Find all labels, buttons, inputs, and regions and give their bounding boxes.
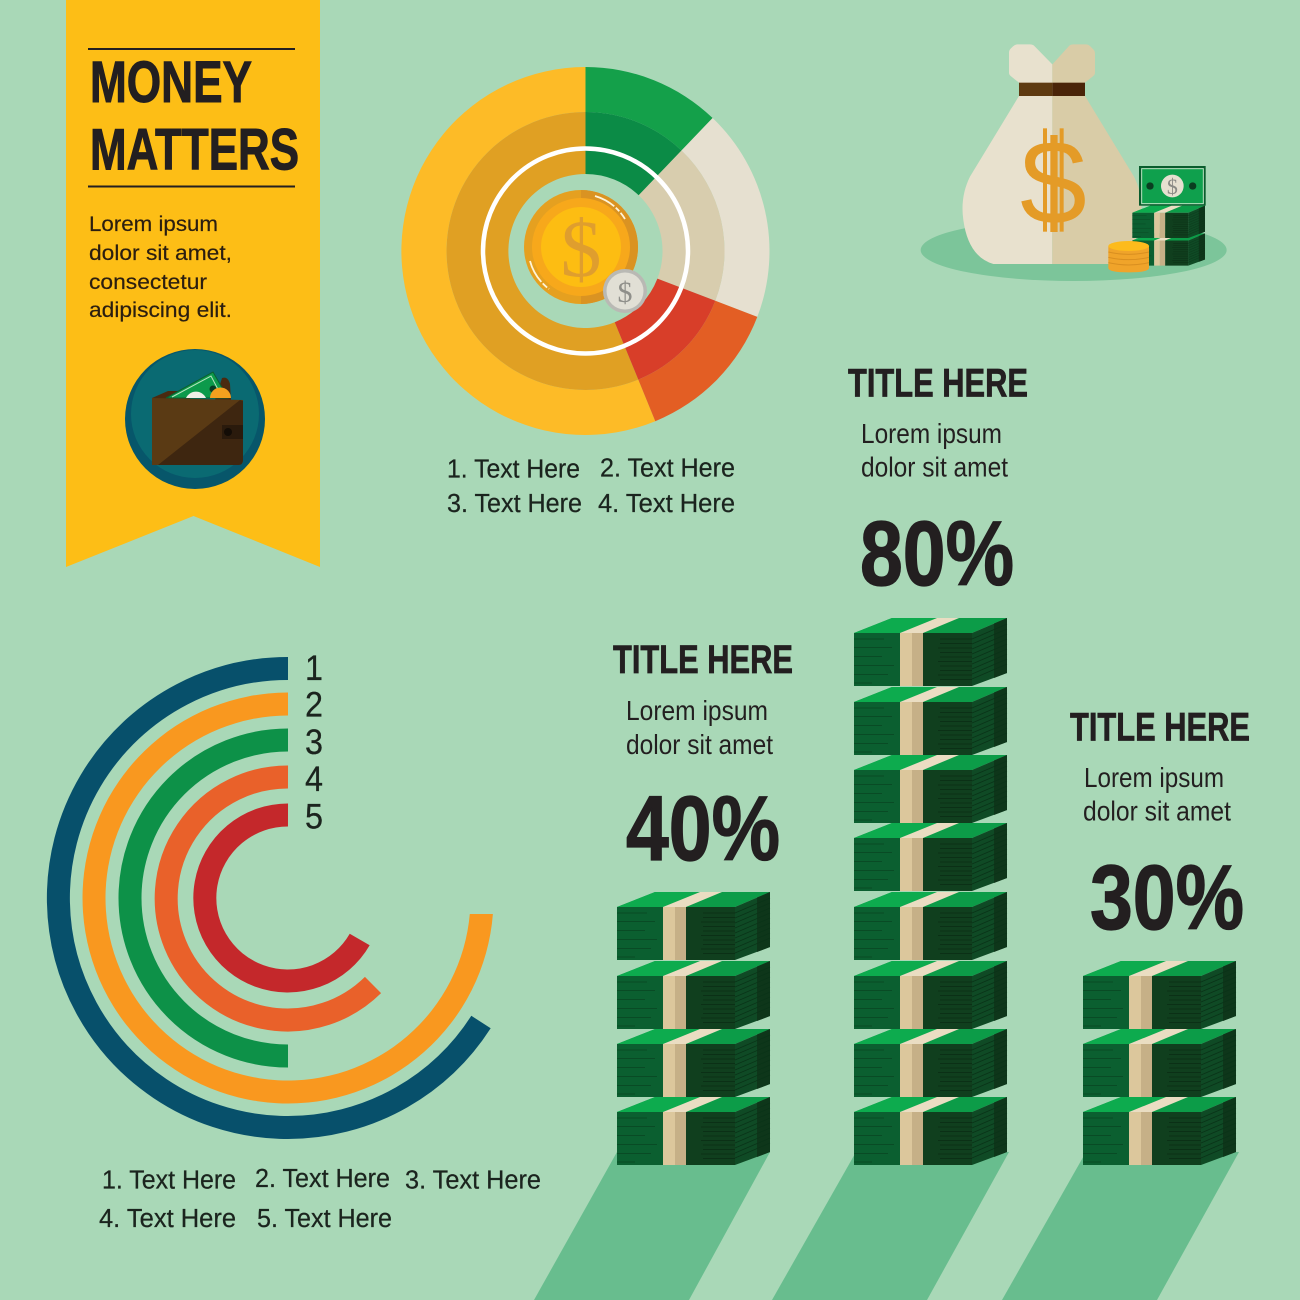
heading: TITLE HERE: [613, 638, 793, 682]
title: money matters: MONEY: [90, 50, 252, 115]
icon: gold coin: [524, 190, 638, 304]
text block: [626, 695, 773, 760]
column: 80%: [848, 362, 1028, 1165]
text block: dolor sit amet: [1083, 796, 1231, 826]
title: money matters: MATTERS: [90, 118, 299, 182]
column: 40%: [613, 638, 793, 1165]
banknote: [1139, 166, 1206, 206]
text block: Lorem ipsum: [861, 418, 1002, 449]
red segment: [615, 279, 757, 421]
arc numbers: 5: [305, 798, 323, 836]
arc numbers: 4: [305, 760, 323, 799]
bag body: [962, 44, 1141, 264]
ground ellipse: [921, 219, 1227, 281]
beige segment: [639, 118, 769, 317]
arc 2: [83, 692, 493, 1103]
icon: gold coin: $: [560, 203, 602, 294]
arc 4: [166, 777, 373, 1020]
icon: silver coin: [603, 269, 647, 313]
coins: [1108, 241, 1149, 272]
arc legend: 3. Text Here: [405, 1166, 541, 1194]
chart: concentric arcs: [58, 668, 493, 1128]
text block: Lorem ipsum: [626, 695, 768, 726]
money stack: [617, 892, 770, 1165]
heading: TITLE HERE: [848, 362, 1028, 406]
donut legend: 2. Text Here: [600, 454, 735, 482]
text block: Lorem ipsum: [1084, 762, 1224, 793]
ribbon shape: [66, 0, 320, 567]
arc 1: [58, 668, 481, 1128]
yellow segment: [401, 67, 655, 435]
percentage: 40%: [626, 778, 780, 880]
heading: TITLE HERE: [1070, 706, 1250, 750]
percentage: 80%: [860, 503, 1014, 605]
column: 30%: [1070, 706, 1250, 1165]
arc numbers: 2: [305, 686, 323, 724]
icon: money bag: [921, 44, 1227, 281]
icon: wallet: [125, 349, 265, 489]
arc 3: [130, 740, 288, 1056]
arc legend: 5. Text Here: [257, 1205, 392, 1233]
donut legend: 3. Text Here: [447, 490, 582, 518]
arc legend: 1. Text Here: [102, 1166, 236, 1194]
ribbon text block: dolor sit amet,: [89, 241, 232, 265]
donut legend: 1. Text Here: [447, 456, 580, 484]
banknote: $: [1167, 174, 1178, 199]
arc numbers: 3: [305, 723, 323, 762]
money stack: [1132, 206, 1205, 266]
bag body: $: [1020, 115, 1087, 249]
panel: title ribbon: [66, 0, 320, 567]
ribbon text block: [89, 212, 232, 322]
ribbon text block: Lorem ipsum: [89, 212, 218, 236]
text block: dolor sit amet: [626, 729, 773, 760]
white ring: [483, 148, 688, 354]
text block: [1083, 762, 1231, 826]
arc numbers: 1: [305, 649, 323, 688]
arc numbers: [305, 649, 323, 836]
donut legend: 4. Text Here: [598, 490, 735, 518]
ribbon text block: consectetur: [89, 270, 207, 294]
money stack: [854, 618, 1007, 1165]
text block: [861, 418, 1008, 482]
title: money matters: [88, 48, 299, 188]
donut legend: [447, 454, 735, 518]
arc legend: 2. Text Here: [255, 1165, 390, 1193]
long shadows: [534, 1152, 1239, 1300]
arc 5: [205, 815, 360, 981]
arc legend: 4. Text Here: [99, 1205, 236, 1233]
money stack: [1083, 961, 1236, 1165]
ribbon text block: adipiscing elit.: [89, 298, 232, 322]
arc legend: [99, 1165, 541, 1233]
text block: dolor sit amet: [861, 452, 1008, 482]
percentage: 30%: [1090, 847, 1244, 949]
chart: donut: [401, 67, 769, 435]
icon: silver coin: $: [618, 276, 632, 309]
green segment: [586, 67, 713, 195]
